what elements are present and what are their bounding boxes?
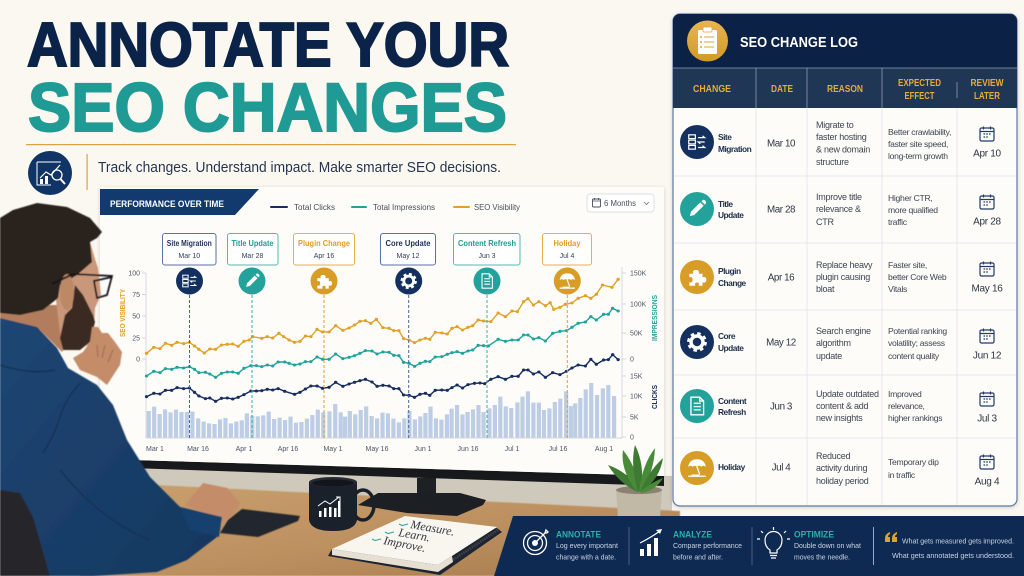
table row: title update: relevance &	[816, 204, 861, 214]
table row: holiday: Temporary dip	[888, 457, 939, 467]
line chart: seo visibility	[147, 279, 618, 353]
tagline: Track changes. Understand impact. Make smarter SEO decisions.	[98, 160, 501, 176]
callout: content refresh: Jun 3	[478, 253, 496, 260]
right axis labels: 15K	[630, 374, 643, 380]
face	[56, 242, 101, 350]
title	[27, 11, 509, 146]
table row: core update: update	[816, 351, 842, 361]
icon: title update	[680, 192, 714, 226]
table row: title update: Mar 28	[767, 204, 796, 216]
x axis labels: May 1	[323, 446, 343, 453]
icon: plugin change	[680, 260, 714, 294]
table row: plugin change	[680, 260, 1003, 294]
text block: analyze: before and after.	[673, 552, 723, 562]
table row: content refresh: content & add	[816, 401, 869, 411]
left axis labels: 0	[136, 356, 140, 364]
callout: content refresh	[454, 234, 520, 265]
table row: holiday: Jul 4	[772, 462, 791, 474]
left axis labels: 25	[132, 336, 140, 342]
icon: growth chart	[640, 529, 662, 556]
left axis labels: 50	[132, 314, 140, 320]
table row: plugin change: plugin causing	[816, 272, 870, 282]
callout: holiday: Holiday	[554, 239, 581, 248]
callout: title update	[228, 234, 278, 265]
text block: analyze: ANALYZE	[673, 530, 712, 540]
table row: core update: Jun 12	[973, 350, 1002, 362]
panel heading: performance over time	[100, 189, 259, 215]
table row: content refresh: Content	[718, 396, 747, 406]
icon: light bulb	[757, 527, 790, 558]
table row: title update: Improve title	[816, 192, 862, 202]
right axis labels: 10K	[630, 394, 643, 400]
title line: seo changes: SEO CHANGES	[28, 69, 507, 146]
table row: plugin change: May 16	[972, 284, 1003, 294]
table column headers: EFFECT	[904, 91, 934, 102]
icon: holiday	[680, 451, 714, 485]
table row: site migration	[680, 120, 1002, 167]
x axis labels: Mar 16	[187, 446, 209, 453]
table row: core update: May 12	[766, 338, 796, 348]
quote	[892, 536, 1014, 560]
monitor stand	[417, 478, 436, 498]
table column headers: CHANGE	[693, 84, 731, 95]
table row: plugin change: Faster site,	[888, 260, 927, 270]
callout: core update: Core Update	[386, 239, 431, 248]
title line: annotate your: ANNOTATE YOUR	[27, 11, 509, 80]
icon: content refresh marker	[474, 268, 500, 294]
text block: annotate: Log every important	[556, 541, 618, 550]
wall below monitor	[120, 462, 672, 516]
table row: title update: Apr 28	[973, 216, 1002, 228]
monitor bezel	[100, 459, 664, 486]
table row: site migration: Site	[718, 132, 732, 142]
table row: site migration: Apr 10	[973, 148, 1002, 160]
axes	[142, 267, 626, 438]
legend: Total Clicks	[294, 203, 335, 212]
icon: holiday marker	[554, 268, 581, 294]
text block: analyze: Compare performance	[673, 541, 742, 550]
text block: annotate	[556, 530, 618, 562]
panel: bottom takeaways bar	[494, 516, 1024, 576]
icon: content refresh	[680, 389, 714, 423]
table row: plugin change: Vitals	[888, 284, 907, 294]
x axis labels: Jun 1	[414, 446, 432, 453]
dropdown: 6 months	[587, 194, 654, 212]
icon: site migration marker	[176, 268, 203, 294]
left axis labels: 75	[132, 292, 140, 299]
panel: seo change log	[673, 14, 1017, 506]
text block: annotate: ANNOTATE	[556, 530, 601, 540]
glasses	[52, 274, 112, 298]
line chart: total clicks	[147, 355, 618, 401]
table column headers: DATE	[771, 84, 793, 95]
x axis labels: Apr 1	[236, 446, 252, 453]
log heading: SEO CHANGE LOG	[740, 35, 858, 51]
table row: plugin change: Apr 16	[768, 272, 795, 284]
table row: core update: content quality	[888, 351, 940, 361]
text block: optimize: Double down on what	[794, 541, 861, 550]
legend: Total Impressions	[373, 203, 435, 212]
callout: site migration: Mar 10	[178, 253, 200, 260]
coffee mug	[309, 477, 374, 531]
table row: site migration: faster hosting	[816, 132, 867, 142]
icon: clipboard	[687, 20, 728, 62]
table row: holiday: activity during	[816, 463, 868, 473]
callout: site migration: Site Migration	[167, 239, 212, 248]
right axis labels: 150K	[630, 270, 647, 278]
x axis labels: May 16	[366, 446, 389, 453]
panel: monitor screen	[100, 187, 664, 476]
table row: site migration: structure	[816, 157, 849, 167]
table row: site migration: Mar 10	[767, 138, 796, 150]
monitor stand base	[358, 493, 486, 516]
x axis labels: Jun 16	[457, 446, 479, 453]
axis title: impressions: IMPRESSIONS	[650, 295, 659, 341]
quote: What gets measured gets improved.	[902, 536, 1014, 546]
x axis labels	[146, 446, 613, 453]
x axis labels: Aug 1	[595, 446, 613, 453]
axis title: seo visibility: SEO VISIBILITY	[118, 289, 127, 337]
table row: title update: more qualified	[888, 205, 938, 215]
desk	[80, 485, 680, 576]
table row: content refresh	[680, 389, 998, 424]
legend: SEO Visibility	[474, 203, 520, 212]
x axis labels: Jul 1	[505, 446, 519, 453]
man at desk	[0, 203, 240, 576]
right axis labels: 50K	[630, 330, 643, 338]
legend	[270, 203, 520, 212]
table row: site migration: Better crawlability,	[888, 127, 951, 137]
quote: What gets annotated gets understood.	[892, 551, 1014, 560]
x axis labels: Apr 16	[278, 446, 298, 453]
table column headers: LATER	[974, 91, 1001, 102]
chair	[0, 490, 50, 576]
icon: site migration	[680, 125, 714, 159]
table row: title update: traffic	[888, 217, 908, 227]
icon: core update	[680, 325, 714, 359]
text block: annotate: change with a date.	[556, 552, 616, 562]
table row: core update	[680, 325, 1002, 362]
shirt	[0, 318, 220, 576]
column header band	[673, 68, 1017, 108]
callout: plugin change: Plugin Change	[298, 239, 351, 248]
bar chart: clicks bars	[149, 383, 614, 438]
table row: title update	[680, 192, 1002, 228]
callout: site migration	[162, 234, 216, 265]
table row: content refresh: Jun 3	[770, 402, 793, 412]
table row: plugin change: Change	[718, 278, 747, 288]
right axis labels	[630, 270, 647, 442]
left axis labels: 100	[128, 270, 140, 278]
potted plant	[608, 445, 663, 518]
table row: core update: Search engine	[816, 326, 871, 336]
text block: optimize: OPTIMIZE	[794, 530, 834, 540]
table row: holiday: holiday period	[816, 476, 869, 486]
table column headers: EXPECTED	[898, 78, 941, 89]
callout: core update: May 12	[397, 253, 420, 260]
table column headers: REVIEW	[970, 78, 1004, 89]
table row: content refresh: Refresh	[718, 407, 746, 417]
table row: site migration: Migration	[718, 144, 752, 154]
cuff	[180, 507, 222, 537]
x axis labels: Jul 16	[549, 446, 567, 453]
text block: optimize: moves the needle.	[794, 552, 850, 562]
icon: plugin change marker	[310, 268, 338, 294]
icon: quotation mark	[885, 532, 897, 542]
table row: content refresh: Jul 3	[977, 414, 998, 424]
text block: analyze	[673, 530, 742, 562]
callout: title update: Mar 28	[242, 253, 263, 260]
callout: holiday: Jul 4	[560, 253, 574, 260]
beard	[60, 285, 95, 350]
callout: title update: Title Update	[232, 239, 274, 248]
left axis labels	[128, 270, 140, 364]
table row: holiday: Aug 4	[975, 476, 1000, 488]
ear	[60, 274, 74, 310]
keyboard	[220, 509, 300, 537]
hand on keyboard	[185, 483, 240, 525]
notebook text: measure learn improve: Measure.	[408, 517, 456, 539]
table row: site migration: faster site speed,	[888, 139, 948, 149]
neck	[0, 305, 66, 352]
table row: content refresh: Improved	[888, 389, 922, 399]
table row: plugin change: bloat	[816, 284, 835, 294]
table row: plugin change: better Core Web	[888, 272, 947, 282]
table row: holiday: Reduced	[816, 451, 851, 461]
notebook text: measure learn improve	[381, 517, 456, 555]
table row: content refresh: relevance,	[888, 401, 925, 411]
table column headers: REASON	[827, 84, 863, 95]
dropdown: 6 months: 6 Months	[604, 199, 636, 208]
table row: site migration: long-term growth	[888, 151, 948, 161]
callout: core update	[380, 234, 436, 265]
table row: plugin change: Replace heavy	[816, 260, 873, 270]
hand on chin	[73, 327, 122, 385]
table column headers	[693, 78, 1004, 102]
notebook text: measure learn improve: Improve.	[381, 533, 427, 555]
notebook text: measure learn improve: Learn.	[396, 525, 431, 544]
annotation lines	[190, 295, 567, 438]
table row: content refresh: Update outdated	[816, 389, 879, 399]
icon: title update marker	[238, 268, 266, 294]
axis title: clicks: CLICKS	[650, 385, 659, 409]
panel heading: performance over time: PERFORMANCE OVER TIME	[110, 199, 224, 210]
right axis labels: 100K	[630, 302, 647, 308]
table row: title update: Update	[718, 210, 744, 220]
table row: holiday	[680, 451, 1000, 488]
callout: content refresh: Content Refresh	[458, 239, 516, 248]
table row: content refresh: new insights	[816, 413, 863, 423]
table row: content refresh: higher rankings	[888, 413, 942, 423]
right axis labels: 5K	[630, 414, 639, 422]
table row: core update: volatility; assess	[888, 338, 945, 348]
table row: core update: algorithm	[816, 338, 851, 348]
table row: site migration: Migrate to	[816, 120, 854, 130]
callout: holiday	[542, 234, 592, 265]
x axis labels: Mar 1	[146, 446, 164, 453]
table row: holiday: in traffic	[888, 470, 916, 480]
table row: title update: Title	[718, 199, 733, 209]
right axis labels: 0	[630, 434, 634, 442]
table row: title update: Higher CTR,	[888, 193, 932, 203]
icon: analytics magnifier	[28, 151, 72, 195]
line chart: total impressions	[147, 308, 618, 377]
table row: title update: CTR	[816, 217, 834, 227]
table row: plugin change: Plugin	[718, 266, 741, 276]
table row: core update: Update	[718, 343, 744, 353]
table row: site migration: & new domain	[816, 144, 870, 154]
table row: core update: Core	[718, 331, 736, 341]
table row: core update: Potential ranking	[888, 326, 947, 336]
table row: holiday: Holiday	[718, 462, 746, 472]
hair	[0, 203, 102, 315]
callout: plugin change: Apr 16	[314, 253, 334, 260]
icon: target	[524, 530, 548, 554]
text block: optimize	[794, 530, 861, 562]
right axis labels: 0	[630, 356, 634, 364]
icon: core update marker	[395, 268, 422, 294]
callout: plugin change	[294, 234, 354, 265]
notebook	[328, 516, 502, 575]
